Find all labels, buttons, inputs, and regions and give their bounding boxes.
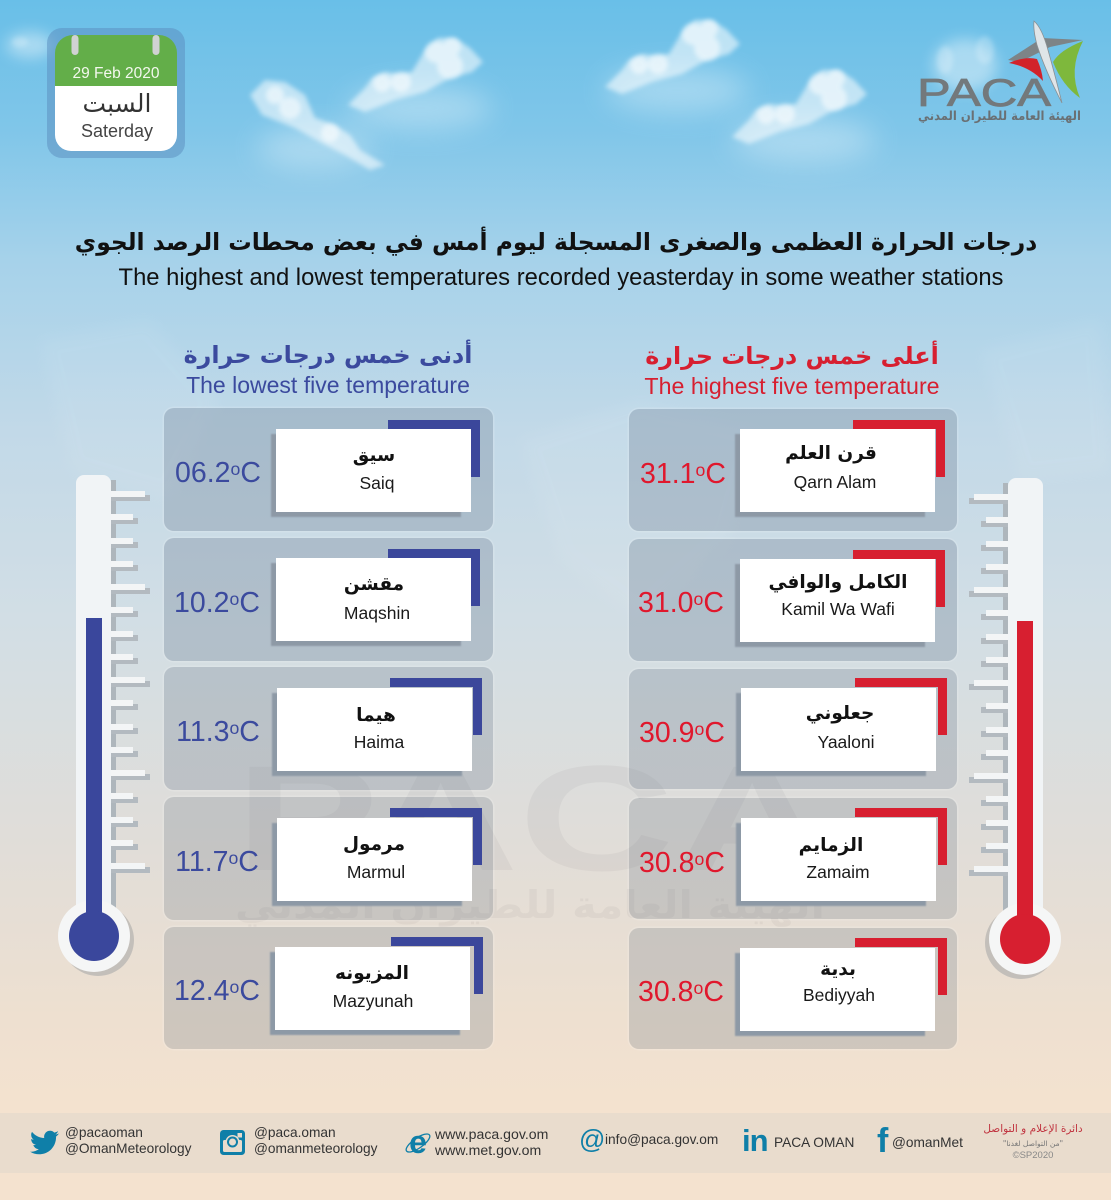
heading arabic lowest: أدنى خمس درجات حرارة bbox=[184, 341, 472, 369]
thermometer: lowest (blue) bbox=[58, 475, 150, 976]
temperature 06.2: 06.2oC bbox=[175, 457, 261, 489]
temperature 12.4: 12.4oC bbox=[174, 975, 260, 1007]
station english: Zamaim bbox=[806, 862, 870, 882]
station english: Yaaloni bbox=[817, 732, 875, 752]
instagram handles: @omanmeteorology bbox=[254, 1141, 377, 1156]
web addresses: www.paca.gov.om bbox=[435, 1126, 548, 1142]
twitter handles bbox=[65, 1125, 192, 1156]
thermometer: highest (red) bbox=[969, 478, 1061, 979]
station english: Haima bbox=[354, 732, 404, 752]
panel: Kamil Wa Wafi bbox=[629, 539, 957, 661]
web addresses bbox=[435, 1126, 548, 1158]
icon: at sign: @ bbox=[579, 1124, 605, 1154]
web addresses: www.met.gov.om bbox=[435, 1142, 541, 1158]
panel: Saiq bbox=[164, 408, 493, 531]
heading arabic highest: أعلى خمس درجات حرارة bbox=[645, 342, 939, 370]
icon: twitter bird bbox=[30, 1130, 59, 1154]
station english: Maqshin bbox=[344, 603, 410, 623]
footer: instagram bbox=[220, 1125, 378, 1156]
station arabic: هيما bbox=[356, 705, 396, 726]
calendar body: day bbox=[55, 86, 177, 151]
footer: twitter bbox=[30, 1125, 192, 1156]
panel: Qarn Alam bbox=[629, 409, 957, 531]
logo plane wings bbox=[1008, 38, 1083, 62]
heading: lowest five bbox=[184, 340, 472, 398]
temperature 30.9: 30.9oC bbox=[639, 717, 725, 749]
calendar rings bbox=[72, 35, 160, 55]
calendar body: day: السبت bbox=[83, 89, 151, 118]
footer: linkedin bbox=[742, 1123, 854, 1158]
footer: email bbox=[579, 1124, 718, 1154]
temperature 30.8: 30.8oC bbox=[638, 976, 724, 1008]
calendar header: date: 29 Feb 2020 bbox=[72, 65, 160, 82]
calendar card bbox=[47, 28, 185, 158]
linkedin name: PACA OMAN bbox=[774, 1135, 854, 1150]
station english: Bediyyah bbox=[803, 985, 875, 1005]
station arabic: المزيونه bbox=[335, 963, 409, 984]
station english: Qarn Alam bbox=[794, 472, 876, 492]
temperature 31.1: 31.1oC bbox=[640, 458, 726, 490]
footer credit bbox=[983, 1123, 1083, 1161]
station arabic: بدية bbox=[820, 959, 856, 980]
motto: "من التواصل لغدنا" bbox=[1003, 1139, 1063, 1148]
main title arabic: درجات الحرارة العظمى والصغرى المسجلة ليوم أمس في بعض محطات الرصد الجوي bbox=[75, 228, 1037, 256]
footer: web bbox=[406, 1126, 548, 1158]
panel: Bediyyah bbox=[629, 928, 957, 1049]
main title english: The highest and lowest temperatures recorded yeasterday in some weather stations bbox=[119, 264, 1003, 291]
department name: دائرة الإعلام و التواصل bbox=[983, 1123, 1083, 1135]
watermark bbox=[235, 750, 830, 927]
station arabic: جعلوني bbox=[806, 703, 874, 724]
icon: linkedin: in bbox=[742, 1123, 768, 1158]
calendar header: date bbox=[55, 35, 177, 87]
logo plane fuselage bbox=[1034, 21, 1062, 103]
logo wordmark: PACA bbox=[917, 72, 1051, 115]
footer band bbox=[0, 1113, 1111, 1173]
temperature 11.7: 11.7oC bbox=[175, 846, 259, 878]
icon: facebook: f bbox=[877, 1122, 888, 1160]
twitter handles: @pacaoman bbox=[65, 1125, 143, 1140]
station english: Kamil Wa Wafi bbox=[781, 599, 895, 619]
heading english highest: The highest five temperature bbox=[644, 373, 940, 399]
station english: Marmul bbox=[347, 862, 405, 882]
temperature 31.0: 31.0oC bbox=[638, 587, 724, 619]
panel: Marmul bbox=[164, 797, 493, 920]
station arabic: مقشن bbox=[344, 574, 404, 595]
panel: Maqshin bbox=[164, 538, 493, 661]
temperature 30.8: 30.8oC bbox=[639, 847, 725, 879]
station arabic: سيق bbox=[353, 445, 395, 466]
logo green swoosh bbox=[1053, 41, 1083, 98]
heading: highest five bbox=[644, 340, 940, 399]
station arabic: قرن العلم bbox=[785, 443, 877, 464]
logo red swoosh bbox=[1009, 58, 1043, 81]
PACA logo bbox=[917, 20, 1083, 124]
temperature 11.3: 11.3oC bbox=[176, 716, 260, 748]
panel: Haima bbox=[164, 667, 493, 790]
station arabic: الكامل والوافي bbox=[769, 572, 907, 593]
watermark: الهيئة العامة للطيران المدني bbox=[235, 883, 825, 927]
logo arabic name: الهيئة العامة للطيران المدني bbox=[918, 108, 1081, 123]
panel: Mazyunah bbox=[164, 927, 493, 1049]
station arabic: مرمول bbox=[343, 834, 405, 855]
station english: Saiq bbox=[359, 473, 395, 493]
panel: Zamaim bbox=[629, 798, 957, 919]
station english: Mazyunah bbox=[333, 991, 413, 1011]
temperature 10.2: 10.2oC bbox=[174, 587, 260, 619]
facebook handle: @omanMet bbox=[892, 1135, 963, 1150]
email address: info@paca.gov.om bbox=[605, 1132, 718, 1147]
panel: Yaaloni bbox=[629, 669, 957, 789]
icon: instagram bbox=[220, 1130, 245, 1155]
footer: facebook bbox=[877, 1122, 963, 1160]
twitter handles: @OmanMeteorology bbox=[65, 1141, 192, 1156]
instagram handles: @paca.oman bbox=[254, 1125, 336, 1140]
instagram handles bbox=[254, 1125, 378, 1156]
copyright: ©SP2020 bbox=[1013, 1150, 1053, 1161]
heading english lowest: The lowest five temperature bbox=[186, 372, 470, 398]
station arabic: الزمايم bbox=[799, 835, 863, 856]
calendar body: day: Saterday bbox=[81, 121, 153, 141]
